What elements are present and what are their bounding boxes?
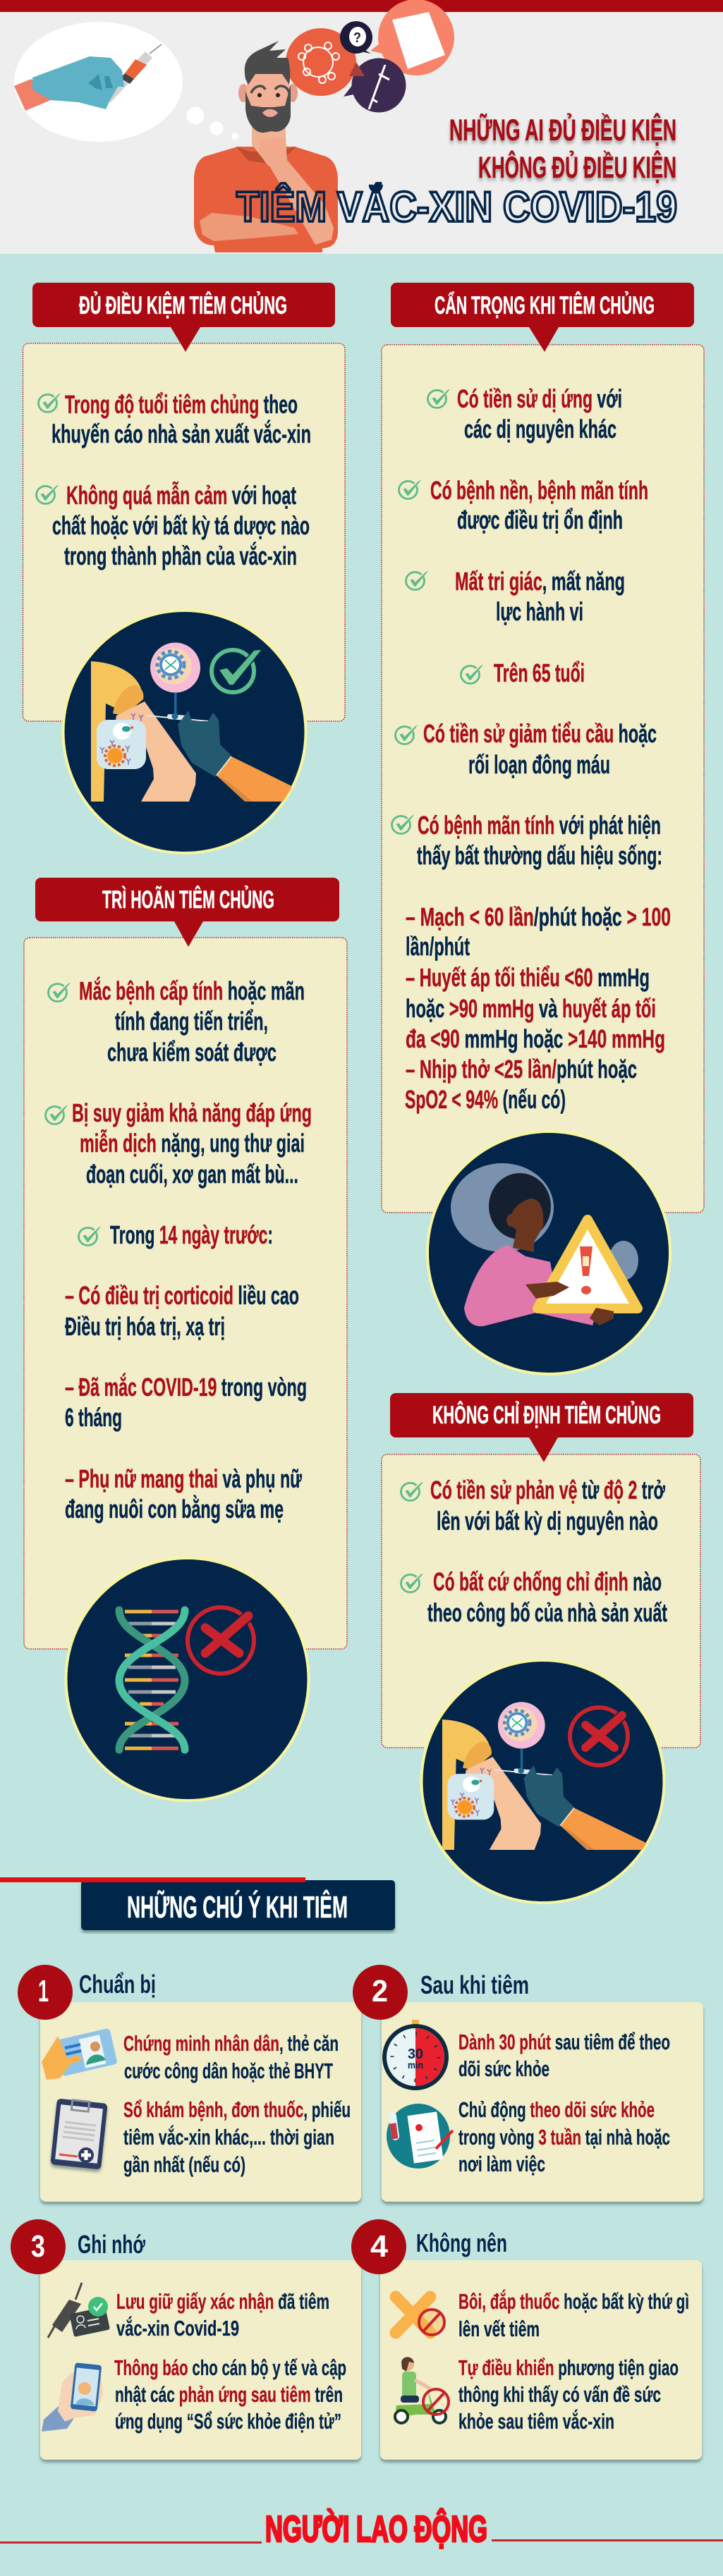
text: medical records <box>123 2097 351 2177</box>
illustration: thinking man <box>194 41 338 252</box>
text: thrombocytopenia <box>423 719 657 779</box>
text: immunodeficiency: đoạn cuối, xơ gan mất bù... <box>86 1160 298 1189</box>
text: vital sign thresholds: – Huyết áp tối thiểu <60 mmHg <box>406 963 650 992</box>
text: thrombocytopenia: rối loạn đông máu <box>468 750 610 779</box>
header grey background <box>0 12 723 254</box>
text: age: khuyến cáo nhà sản xuất vắc-xin <box>51 419 311 448</box>
section heading <box>0 1877 395 1930</box>
text: covid history: 6 tháng <box>65 1403 122 1432</box>
text: hypersensitivity: chất hoặc với bất kỳ tá dược nào <box>52 511 310 540</box>
text: acute illness: chưa kiểm soát được <box>107 1038 277 1067</box>
text: hypersensitivity <box>52 481 310 570</box>
text: covid history <box>65 1372 307 1432</box>
text: covid history: – Đã mắc COVID-19 trong vòng <box>65 1372 307 1402</box>
icon: check <box>392 815 414 833</box>
card 1: prepare <box>18 1965 361 2202</box>
icon: check <box>79 1227 101 1245</box>
icon: clipboard <box>50 2098 108 2170</box>
icon: check <box>37 485 59 503</box>
card title: Sau khi tiêm <box>420 1970 529 1999</box>
icon: check <box>401 1482 423 1500</box>
panel background <box>23 343 345 721</box>
text: pregnant: đang nuôi con bằng sữa mẹ <box>65 1494 284 1523</box>
text: acute illness: Mắc bệnh cấp tính hoặc mãn <box>79 976 305 1005</box>
text: chronic disease <box>430 476 648 534</box>
text: within 14 days: Trong 14 ngày trước: <box>110 1220 273 1249</box>
text: do not apply: lên vết tiêm <box>458 2317 540 2341</box>
icon: stopwatch <box>384 2020 446 2088</box>
illustration: DNA with red cross <box>66 1558 309 1801</box>
icon: check <box>399 480 421 499</box>
card 2: after vaccination <box>353 1965 703 2202</box>
footer: newspaper logo <box>0 2508 723 2550</box>
text: immunodeficiency: Bị suy giảm khả năng đáp ứng <box>72 1098 312 1127</box>
text: chronic with abnormal vitals <box>417 811 662 870</box>
text: vital sign thresholds: SpO2 < 94% (nếu có) <box>405 1085 566 1114</box>
text: wait 30 minutes: dõi sức khỏe <box>458 2056 549 2081</box>
text: keep certificate <box>116 2289 329 2341</box>
text: acute illness <box>79 976 305 1067</box>
panel background <box>382 1454 700 1748</box>
icon: scooter with prohibition <box>395 2357 449 2423</box>
illustration: speech bubbles <box>286 0 454 113</box>
icon: check <box>395 725 418 744</box>
text: notify health staff <box>114 2355 346 2434</box>
title line 3: TIÊM VẮC-XIN COVID-19 <box>236 183 677 231</box>
text: monitor health: trong vòng 3 tuần tại nhà hoặc <box>458 2125 670 2149</box>
icon: syringe and certificate <box>48 2283 110 2338</box>
illustration: gloved hand with syringe in thought bubble <box>14 22 238 142</box>
text: do not apply <box>458 2288 689 2341</box>
text: ID documents: cước công dân hoặc thẻ BHYT <box>124 2059 333 2083</box>
heading: postpone <box>35 878 339 947</box>
panel: postpone vaccination <box>24 878 347 1801</box>
panel background <box>382 345 704 1213</box>
text: over 65: Trên 65 tuổi <box>494 658 585 687</box>
text: keep certificate: Lưu giữ giấy xác nhận đã tiêm <box>116 2289 329 2314</box>
text: loss of awareness <box>455 567 625 626</box>
text: corticoid: – Có điều trị corticoid liều cao <box>65 1281 299 1310</box>
title <box>236 113 677 231</box>
text: notify health staff: nhật các phản ứng sau tiêm trên <box>115 2382 343 2407</box>
text: loss of awareness: lực hành vi <box>496 597 583 626</box>
number badge 2 <box>353 1965 408 2020</box>
illustration: speech bubbles: ? <box>353 30 361 46</box>
text: pregnant: – Phụ nữ mang thai và phụ nữ <box>65 1464 303 1493</box>
card title: Không nên <box>416 2228 507 2257</box>
text: wait 30 minutes: Dành 30 phút sau tiêm để theo <box>458 2030 670 2054</box>
text: vital sign thresholds: đa <90 mmHg hoặc >140 mmHg <box>406 1024 665 1053</box>
icon: check <box>401 1574 423 1592</box>
card title: Chuẩn bị <box>79 1970 156 1999</box>
heading: caution <box>391 283 694 352</box>
number badge 1: 1 <box>38 1974 49 2008</box>
text: vital sign thresholds <box>405 902 671 1114</box>
text: notify health staff: ứng dụng “Sổ sức khỏe điện tử” <box>115 2409 341 2434</box>
icon: check <box>45 1105 68 1124</box>
text: medical records: tiêm vắc-xin khác,... thời gian <box>123 2124 334 2149</box>
number badge 1 <box>18 1965 73 2020</box>
icon: stopwatch: 30 <box>408 2047 423 2062</box>
text: allergy: Có tiền sử dị ứng với <box>457 384 622 413</box>
text: hypersensitivity: trong thành phần của vắc-xin <box>64 541 297 570</box>
text: corticoid <box>65 1281 299 1341</box>
text: do not drive: khỏe sau tiêm vắc-xin <box>458 2408 614 2434</box>
text: monitor health <box>458 2097 670 2176</box>
text: age: Trong độ tuổi tiêm chủng theo <box>65 390 298 419</box>
icon: check <box>427 389 450 407</box>
icon: ID card <box>42 2028 118 2080</box>
text: allergy: các dị nguyên khác <box>464 415 616 443</box>
text: do not drive <box>458 2355 679 2434</box>
icon: check <box>461 665 483 684</box>
illustration: vaccination with cross <box>422 1660 664 1903</box>
text: thrombocytopenia: Có tiền sử giảm tiểu cầu hoặc <box>423 719 657 748</box>
icon: check <box>406 571 428 589</box>
text: wait 30 minutes <box>458 2030 670 2081</box>
heading: postpone: TRÌ HOÃN TIÊM CHỦNG <box>102 885 274 914</box>
panel: use caution <box>382 283 704 1374</box>
text: ID documents <box>123 2031 339 2083</box>
text: acute illness: tính đang tiến triển, <box>115 1007 268 1036</box>
panel: contraindicated <box>382 1393 700 1903</box>
text: monitor health: nơi làm việc <box>458 2152 545 2176</box>
heading: contraindicated <box>390 1393 693 1462</box>
text: age <box>51 390 311 448</box>
text: vital sign thresholds: – Nhịp thở <25 lần/phút hoặc <box>406 1055 637 1084</box>
number badge 4 <box>351 2219 406 2274</box>
icon: check <box>48 983 71 1001</box>
text: keep certificate: vắc-xin Covid-19 <box>116 2315 239 2341</box>
text: vital sign thresholds: – Mạch < 60 lần/phút hoặc > 100 <box>406 902 671 931</box>
text: manufacturer contraindication <box>427 1567 667 1627</box>
text: hypersensitivity: Không quá mẫn cảm với hoạt <box>66 481 296 510</box>
number badge 4: 4 <box>370 2229 389 2264</box>
panel: eligible for vaccination <box>23 283 345 853</box>
icon: check <box>38 393 61 412</box>
text: corticoid: Điều trị hóa trị, xạ trị <box>65 1312 225 1341</box>
text: chronic disease: được điều trị ổn định <box>457 505 623 534</box>
text: medical records: Sổ khám bệnh, đơn thuốc, phiếu <box>123 2097 351 2122</box>
top red bar <box>0 0 723 12</box>
text: vital sign thresholds: hoặc >90 mmHg và huyết áp tối <box>406 994 656 1023</box>
icon: phone in hand <box>42 2362 103 2431</box>
text: anaphylaxis <box>430 1476 665 1535</box>
text: immunodeficiency: miễn dịch nặng, ung thư giai <box>80 1129 305 1158</box>
number badge 3: 3 <box>31 2229 45 2264</box>
header banner <box>0 0 723 254</box>
text: ID documents: Chứng minh nhân dân, thẻ căn <box>123 2031 339 2056</box>
illustration: person holding warning sign <box>427 1131 670 1374</box>
text: monitor health: Chủ động theo dõi sức khỏe <box>458 2097 655 2122</box>
card 4: do not <box>351 2219 702 2460</box>
icon: stopwatch: min <box>408 2059 423 2071</box>
card 3: remember <box>11 2219 361 2460</box>
text: loss of awareness: Mất tri giác, mất năng <box>455 567 625 596</box>
card title: Ghi nhớ <box>78 2230 145 2259</box>
footer: newspaper logo: NGƯỜI LAO ĐỘNG <box>265 2508 487 2550</box>
number badge 3 <box>11 2219 66 2274</box>
text: chronic with abnormal vitals: Có bệnh mãn tính với phát hiện <box>418 811 661 840</box>
text: medical records: gần nhất (nếu có) <box>123 2152 245 2177</box>
text: allergy <box>457 384 622 443</box>
text: immunodeficiency <box>72 1098 312 1189</box>
heading: eligible <box>32 283 335 352</box>
icon: health monitoring <box>387 2104 453 2169</box>
text: notify health staff: Thông báo cho cán bộ y tế và cập <box>114 2355 346 2380</box>
heading: eligible: ĐỦ ĐIỀU KIỆM TIÊM CHỦNG <box>79 291 287 319</box>
text: pregnant <box>65 1464 303 1523</box>
number badge 2: 2 <box>372 1974 388 2008</box>
panel background <box>24 938 347 1649</box>
text: vital sign thresholds: lần/phút <box>406 932 470 961</box>
section heading: NHỮNG CHÚ Ý KHI TIÊM <box>127 1889 348 1925</box>
text: anaphylaxis: Có tiền sử phản vệ từ độ 2 trở <box>430 1476 665 1504</box>
illustration: vaccination with check <box>63 611 310 853</box>
icon: bandage with prohibition <box>396 2297 444 2335</box>
section: notes when vaccinating <box>0 1877 703 2460</box>
